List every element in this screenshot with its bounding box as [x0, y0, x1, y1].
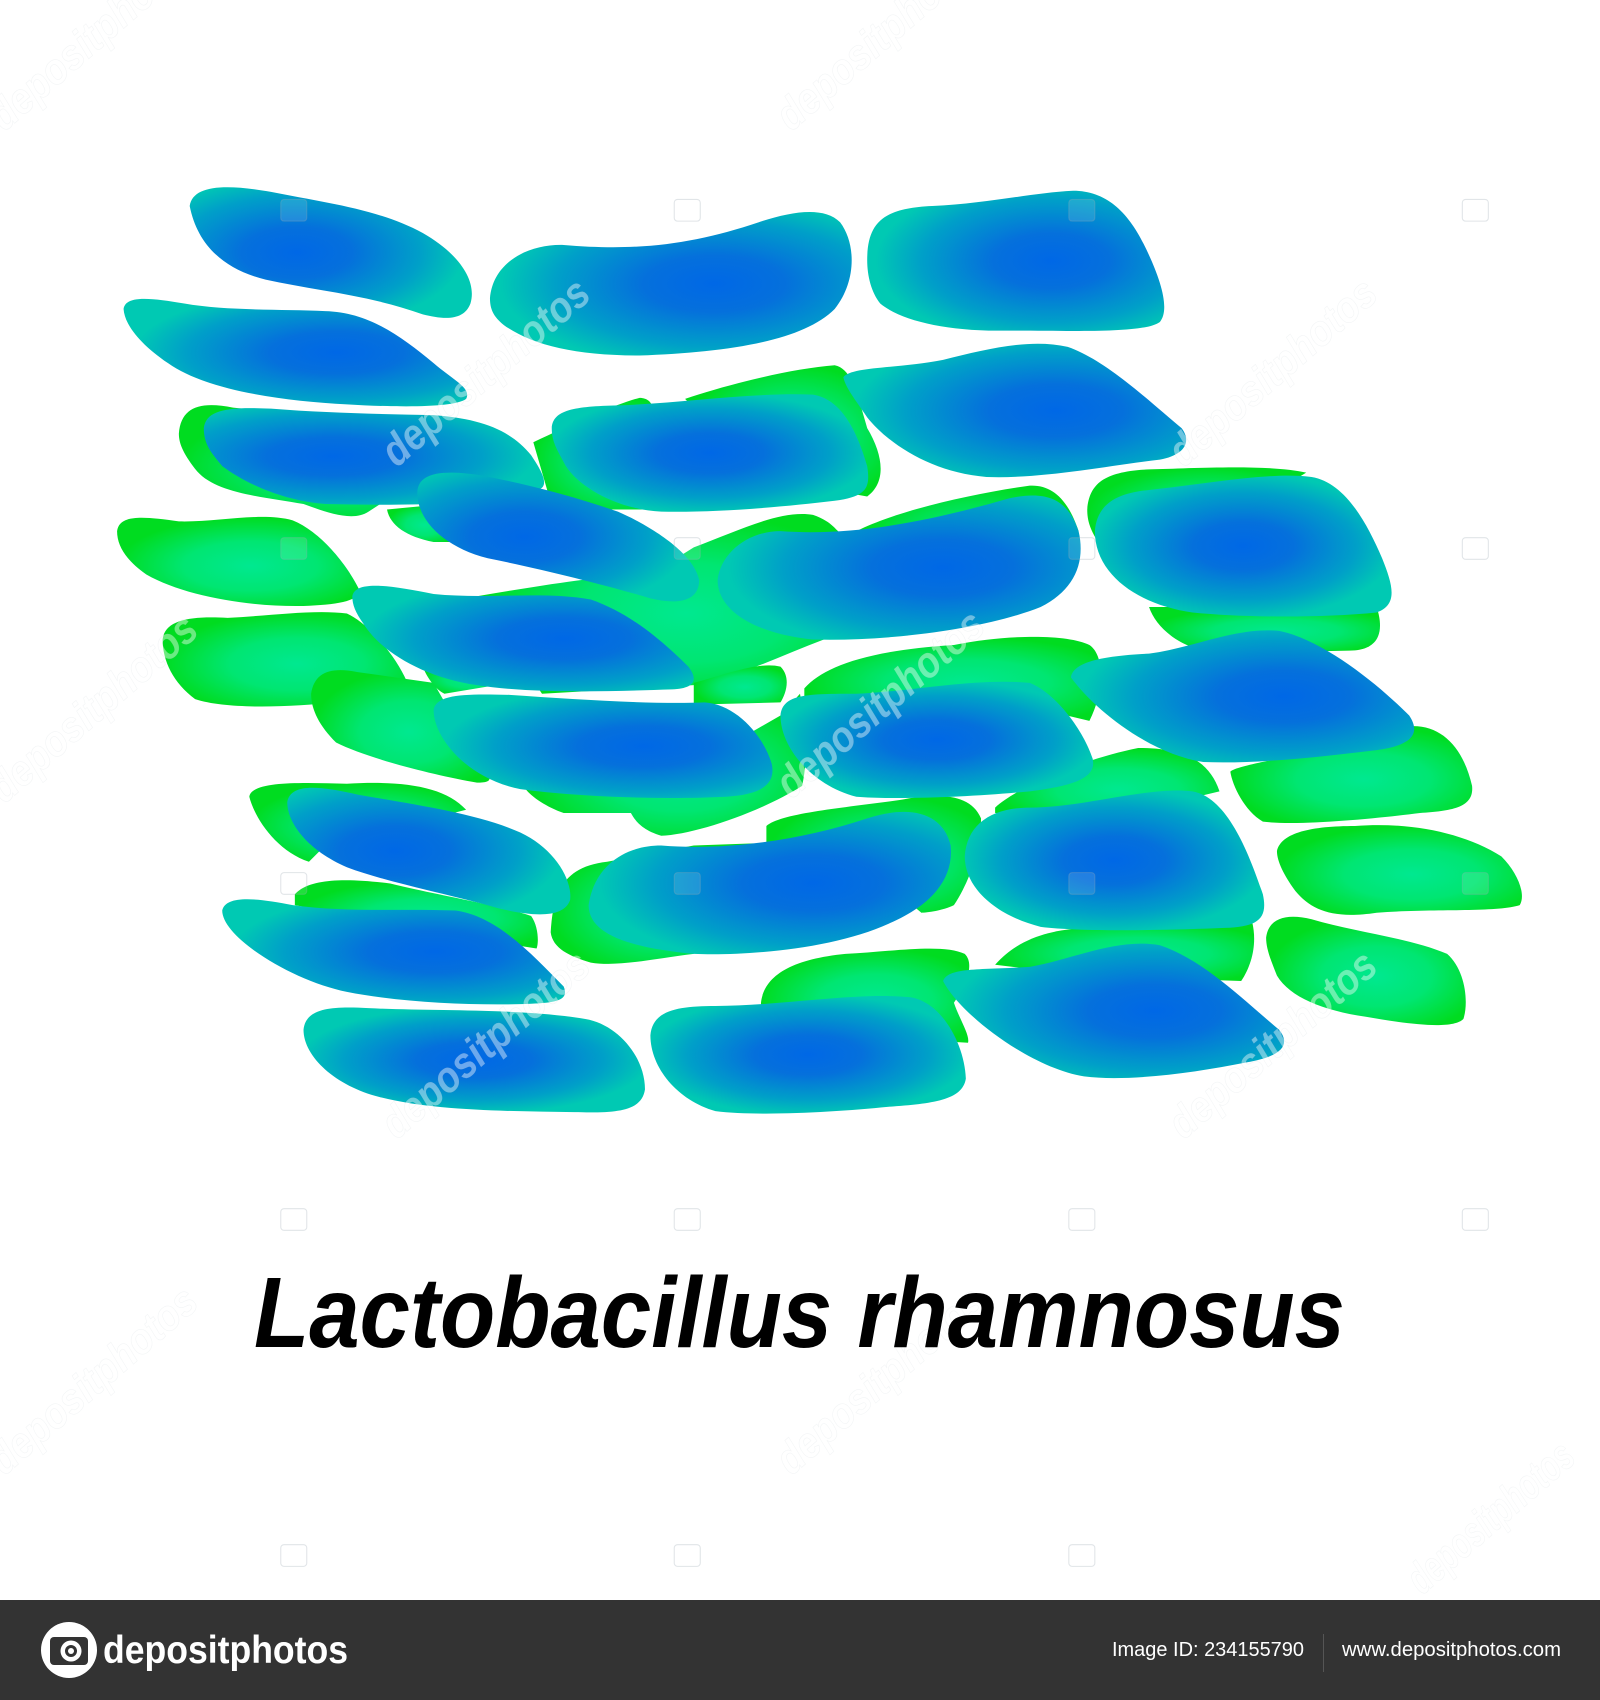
blue cell 15	[287, 788, 570, 914]
green cell u	[295, 880, 538, 948]
watermark camera icons	[281, 199, 1488, 1566]
green cell m	[526, 694, 806, 836]
blue cell 9	[718, 495, 1081, 640]
blue cell 14	[1071, 630, 1414, 762]
stock watermarks: depositphotos	[1159, 941, 1387, 1148]
green cell p	[1230, 726, 1472, 823]
green cell x	[995, 921, 1254, 981]
stock watermarks: depositphotos	[766, 1277, 994, 1484]
blue cell 1	[190, 187, 472, 318]
stock watermarks: depositphotos	[766, 601, 994, 808]
green cell i	[1149, 607, 1380, 651]
blue cell 12	[434, 694, 772, 798]
image id: Image ID: 234155790	[1112, 1639, 1304, 1661]
blue cell 5	[204, 408, 544, 505]
blue cell 21	[943, 944, 1284, 1078]
green cell f	[477, 514, 856, 694]
blue cell 17	[965, 790, 1264, 930]
blue cell 16	[589, 812, 951, 954]
green cell c	[685, 365, 881, 496]
website url: www.depositphotos.com	[1341, 1639, 1561, 1661]
green cell t	[551, 843, 753, 964]
blue cell 10	[1095, 476, 1392, 617]
icon: camera logo	[41, 1622, 97, 1678]
green cell a	[179, 405, 488, 516]
blue cell 4	[124, 299, 467, 406]
green cell e	[163, 612, 406, 706]
blue cell 11	[352, 586, 694, 691]
stock watermarks: depositphotos	[372, 941, 600, 1148]
blue bacteria layer	[124, 187, 1414, 1114]
green cell s	[766, 796, 981, 913]
green cell j	[311, 670, 489, 783]
green cell v	[249, 783, 466, 862]
green cell o	[995, 748, 1220, 824]
title: Lactobacillus rhamnosus	[254, 1257, 1345, 1369]
green cell b	[533, 398, 694, 509]
blue cell 20	[650, 996, 966, 1114]
green cell q	[1277, 825, 1522, 915]
logo wordmark: depositphotos	[103, 1629, 348, 1672]
blue cell 3	[867, 191, 1164, 331]
green cell l	[694, 665, 787, 705]
green cell w	[761, 949, 969, 1043]
blue cell 8	[417, 473, 699, 601]
blue cell 7	[843, 344, 1186, 477]
blue cell 19	[304, 1007, 645, 1112]
green cell r	[1266, 917, 1466, 1025]
green bacteria layer	[117, 365, 1522, 1043]
blue cell 13	[780, 682, 1093, 798]
stock watermarks: depositphotos	[372, 269, 600, 476]
green cell k	[421, 661, 509, 694]
blue cell 2	[490, 212, 852, 356]
green cell g	[856, 486, 1079, 607]
green cell n	[804, 637, 1101, 721]
green cell d	[117, 517, 360, 606]
blue cell 18	[222, 899, 565, 1004]
footer bar	[0, 1600, 1600, 1700]
stock watermarks: depositphotos	[1159, 269, 1387, 476]
green cell b2	[387, 504, 455, 542]
green cell h	[1087, 467, 1306, 553]
blue cell 6	[552, 394, 868, 512]
